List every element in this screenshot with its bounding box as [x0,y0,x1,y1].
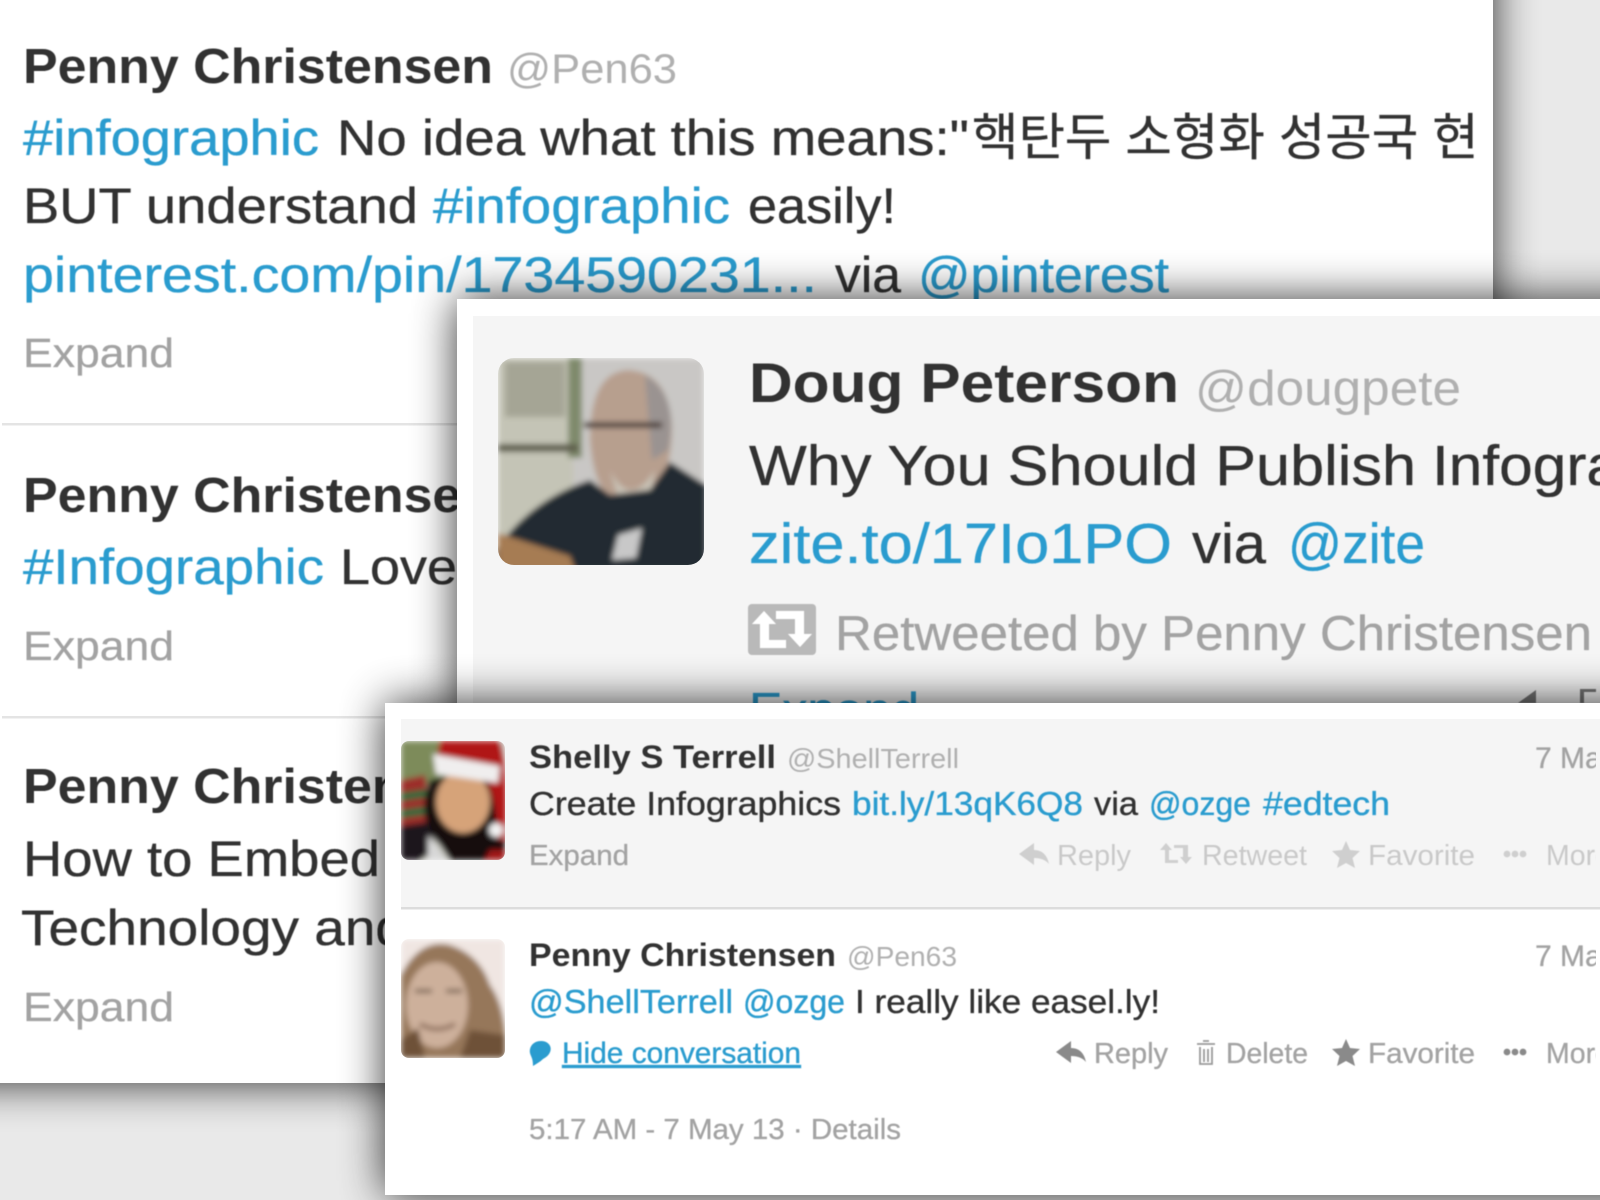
tweet: Why you should publish: zite.to/17Io1PO [749,512,1172,576]
tweet: Why you should publish: Retweeted by Penny Christensen [835,607,1592,661]
tweet: infographic no idea: Penny Christensen [23,40,493,94]
tweet: Create Infographics: Create Infographics [529,786,841,823]
tweet: Create Infographics: via [1094,786,1138,823]
tweet: Create Infographics: Shelly S Terrell [529,739,776,775]
tweet: How to embed [21,760,493,1030]
tweet: Create Infographics: @ozge [1149,786,1251,823]
tweet: infographic no idea: #infographic [23,110,319,166]
tweet: infographic no idea: No idea what this means:" [337,110,969,166]
tweet: I really like easel.ly: @ShellTerrell [529,984,733,1021]
icon: reply, retweet, favorite, more faded [1019,841,1526,868]
tweet: Why you should publish [748,362,1600,703]
tweet: Create Infographics: Expand [529,840,629,872]
tweet: I really like easel.ly: I really like easel.ly! [855,984,1160,1021]
tweet: Create Infographics: Reply [1057,840,1132,872]
tweet: Why you should publish: @zite [1288,512,1425,576]
tweet: infographic no idea: 핵탄두 소형화 성공국 현황 [972,109,1525,166]
icon: Doug Peterson avatar [496,358,706,573]
icon: retweet badge [748,604,816,655]
tweet: Infographic love: Penny Christensen [23,469,493,523]
tweet: Create Infographics: @ShellTerrell [787,743,959,774]
tweet: Infographic love: #Infographic [23,539,324,595]
tweet: infographic no idea: easily! [748,178,896,234]
tweet: Infographic love [23,469,493,669]
tweet: I really like easel.ly: Penny Christensen [529,937,836,973]
tweet: Infographic love: Love [340,539,457,595]
tweet: infographic no idea: @pinterest [918,247,1169,303]
tweet: Create Infographics: Retweet [1202,840,1307,872]
panel: conversation tweets [385,703,1600,1195]
tweet: infographic no idea [23,40,1525,376]
tweet: infographic no idea: #infographic [433,178,730,234]
tweet: infographic no idea: via [835,247,901,303]
tweet: I really like easel.ly: @Pen63 [847,941,957,972]
tweet: I really like easel.ly: @ozge [743,984,845,1021]
tweet: infographic no idea: BUT understand [23,178,418,234]
tweet: infographic no idea: @Pen63 [507,45,677,92]
tweet: How to embed: Penny Christensen [23,760,493,814]
tweet: Create Infographics [529,739,1600,872]
tweet: Why you should publish: Doug Peterson [749,351,1179,414]
tweet: Create Infographics: #edtech [1263,786,1390,823]
icon: Penny avatar [401,939,505,1058]
tweet: I really like easel.ly: Hide conversation [562,1037,801,1070]
panel: Doug Peterson tweet [457,299,1600,749]
icon: speech bubble, reply, trash, favorite, more [530,1039,1526,1066]
icon: Shelly avatar [401,741,506,860]
tweet: Infographic love: Expand [23,623,174,669]
tweet: I really like easel.ly: Reply [1094,1038,1169,1070]
tweet: How to embed: How to Embed [23,831,380,887]
icon: cut-off reply arrow [1518,689,1596,703]
tweet: infographic no idea: pinterest.com/pin/1734590231... [23,247,817,303]
tweet: Why you should publish: @dougpete [1195,362,1461,416]
tweet: Why you should publish: via [1192,512,1266,576]
tweet: Create Infographics: Favorite [1368,840,1475,872]
tweet: How to embed: Technology and [21,900,406,956]
tweet: How to embed: Expand [23,984,174,1030]
tweet: infographic no idea: Expand [23,330,174,376]
tweet: I really like easel.ly [529,937,1600,1146]
tweet: Create Infographics: bit.ly/13qK6Q8 [852,786,1083,823]
tweet: I really like easel.ly: 5:17 AM - 7 May 13 · Details [529,1114,901,1146]
tweet: Why you should publish: Expand [749,684,919,738]
tweet: I really like easel.ly: Favorite [1368,1038,1475,1070]
tweet: Why you should publish: Why You Should Publish [749,434,1416,498]
tweet: I really like easel.ly: Delete [1226,1038,1308,1070]
